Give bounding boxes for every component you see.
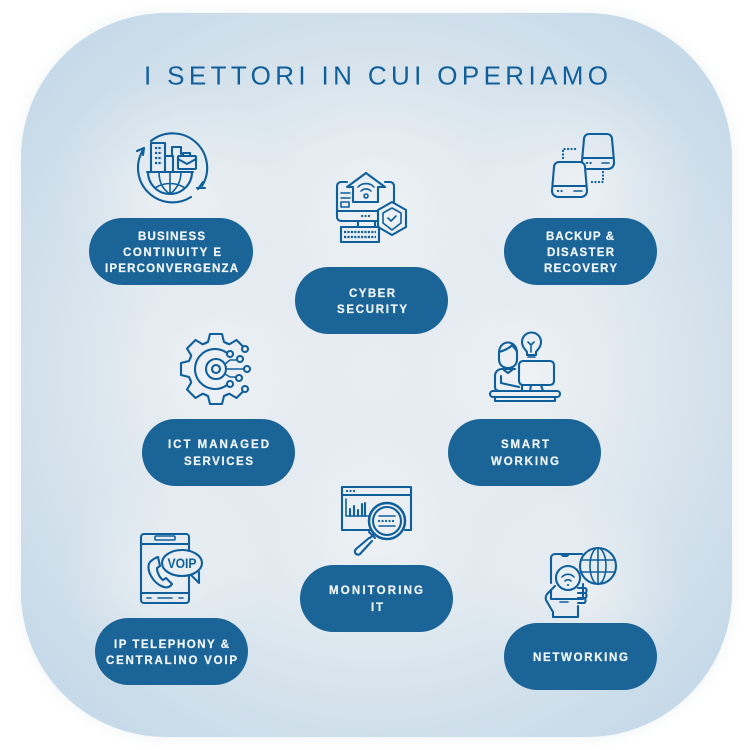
pill: smart working <box>448 419 601 486</box>
label: networking: NETWORKING <box>533 652 628 664</box>
label: backup: BACKUP & <box>546 231 614 243</box>
label: ip telephony: IP TELEPHONY & <box>114 639 229 651</box>
pill: ip telephony <box>95 618 248 685</box>
label: business continuity <box>105 231 238 275</box>
label: cyber security <box>337 288 407 316</box>
pill: cyber security <box>295 267 448 334</box>
card: business continuity <box>89 133 253 285</box>
icon: globe with buildings <box>137 133 207 202</box>
icon: two drives <box>552 134 614 197</box>
label: business continuity: CONTINUITY E <box>123 247 221 259</box>
icon: phone with voip bubble <box>141 534 202 603</box>
pill: monitoring it <box>300 565 453 632</box>
label: monitoring it: IT <box>371 602 383 614</box>
label: backup: RECOVERY <box>544 263 617 275</box>
title: I SETTORI IN CUI OPERIAMO <box>144 60 608 90</box>
label: business continuity: BUSINESS <box>138 231 205 243</box>
label: cyber security: SECURITY <box>337 304 407 316</box>
label: ict managed services: ICT MANAGED <box>168 439 269 451</box>
pill: networking <box>504 623 657 690</box>
icon: gear with circuit <box>181 334 250 404</box>
label: ip telephony: CENTRALINO VOIP <box>106 655 237 667</box>
label: ict managed services <box>168 439 269 468</box>
label: cyber security: CYBER <box>349 288 396 300</box>
card: monitoring it <box>300 487 453 632</box>
card: ict managed services <box>142 334 295 486</box>
pill: ict managed services <box>142 419 295 486</box>
card: ip telephony <box>95 534 248 685</box>
card: cyber security <box>295 173 448 334</box>
label: ict managed services: SERVICES <box>184 456 253 468</box>
card: backup <box>504 134 657 285</box>
label: monitoring it <box>329 585 423 614</box>
card: networking <box>504 548 657 690</box>
icon: hand holding phone and globe <box>546 548 616 617</box>
label: business continuity: IPERCONVERGENZA <box>105 263 238 275</box>
card: smart working <box>448 332 601 486</box>
label: smart working: SMART <box>501 439 549 451</box>
icon: person at computer with bulb <box>490 332 560 401</box>
label: backup <box>544 231 617 275</box>
icon: window with magnifier <box>342 487 411 555</box>
pill: business continuity <box>89 218 253 285</box>
label: smart working <box>491 439 559 468</box>
pill: backup <box>504 218 657 285</box>
icon: computer and shield <box>337 173 406 242</box>
label: ip telephony <box>106 639 237 667</box>
label: backup: DISASTER <box>547 247 615 259</box>
icon: phone with voip bubble: VOIP <box>168 555 196 571</box>
label: smart working: WORKING <box>491 456 559 468</box>
label: monitoring it: MONITORING <box>329 585 423 597</box>
